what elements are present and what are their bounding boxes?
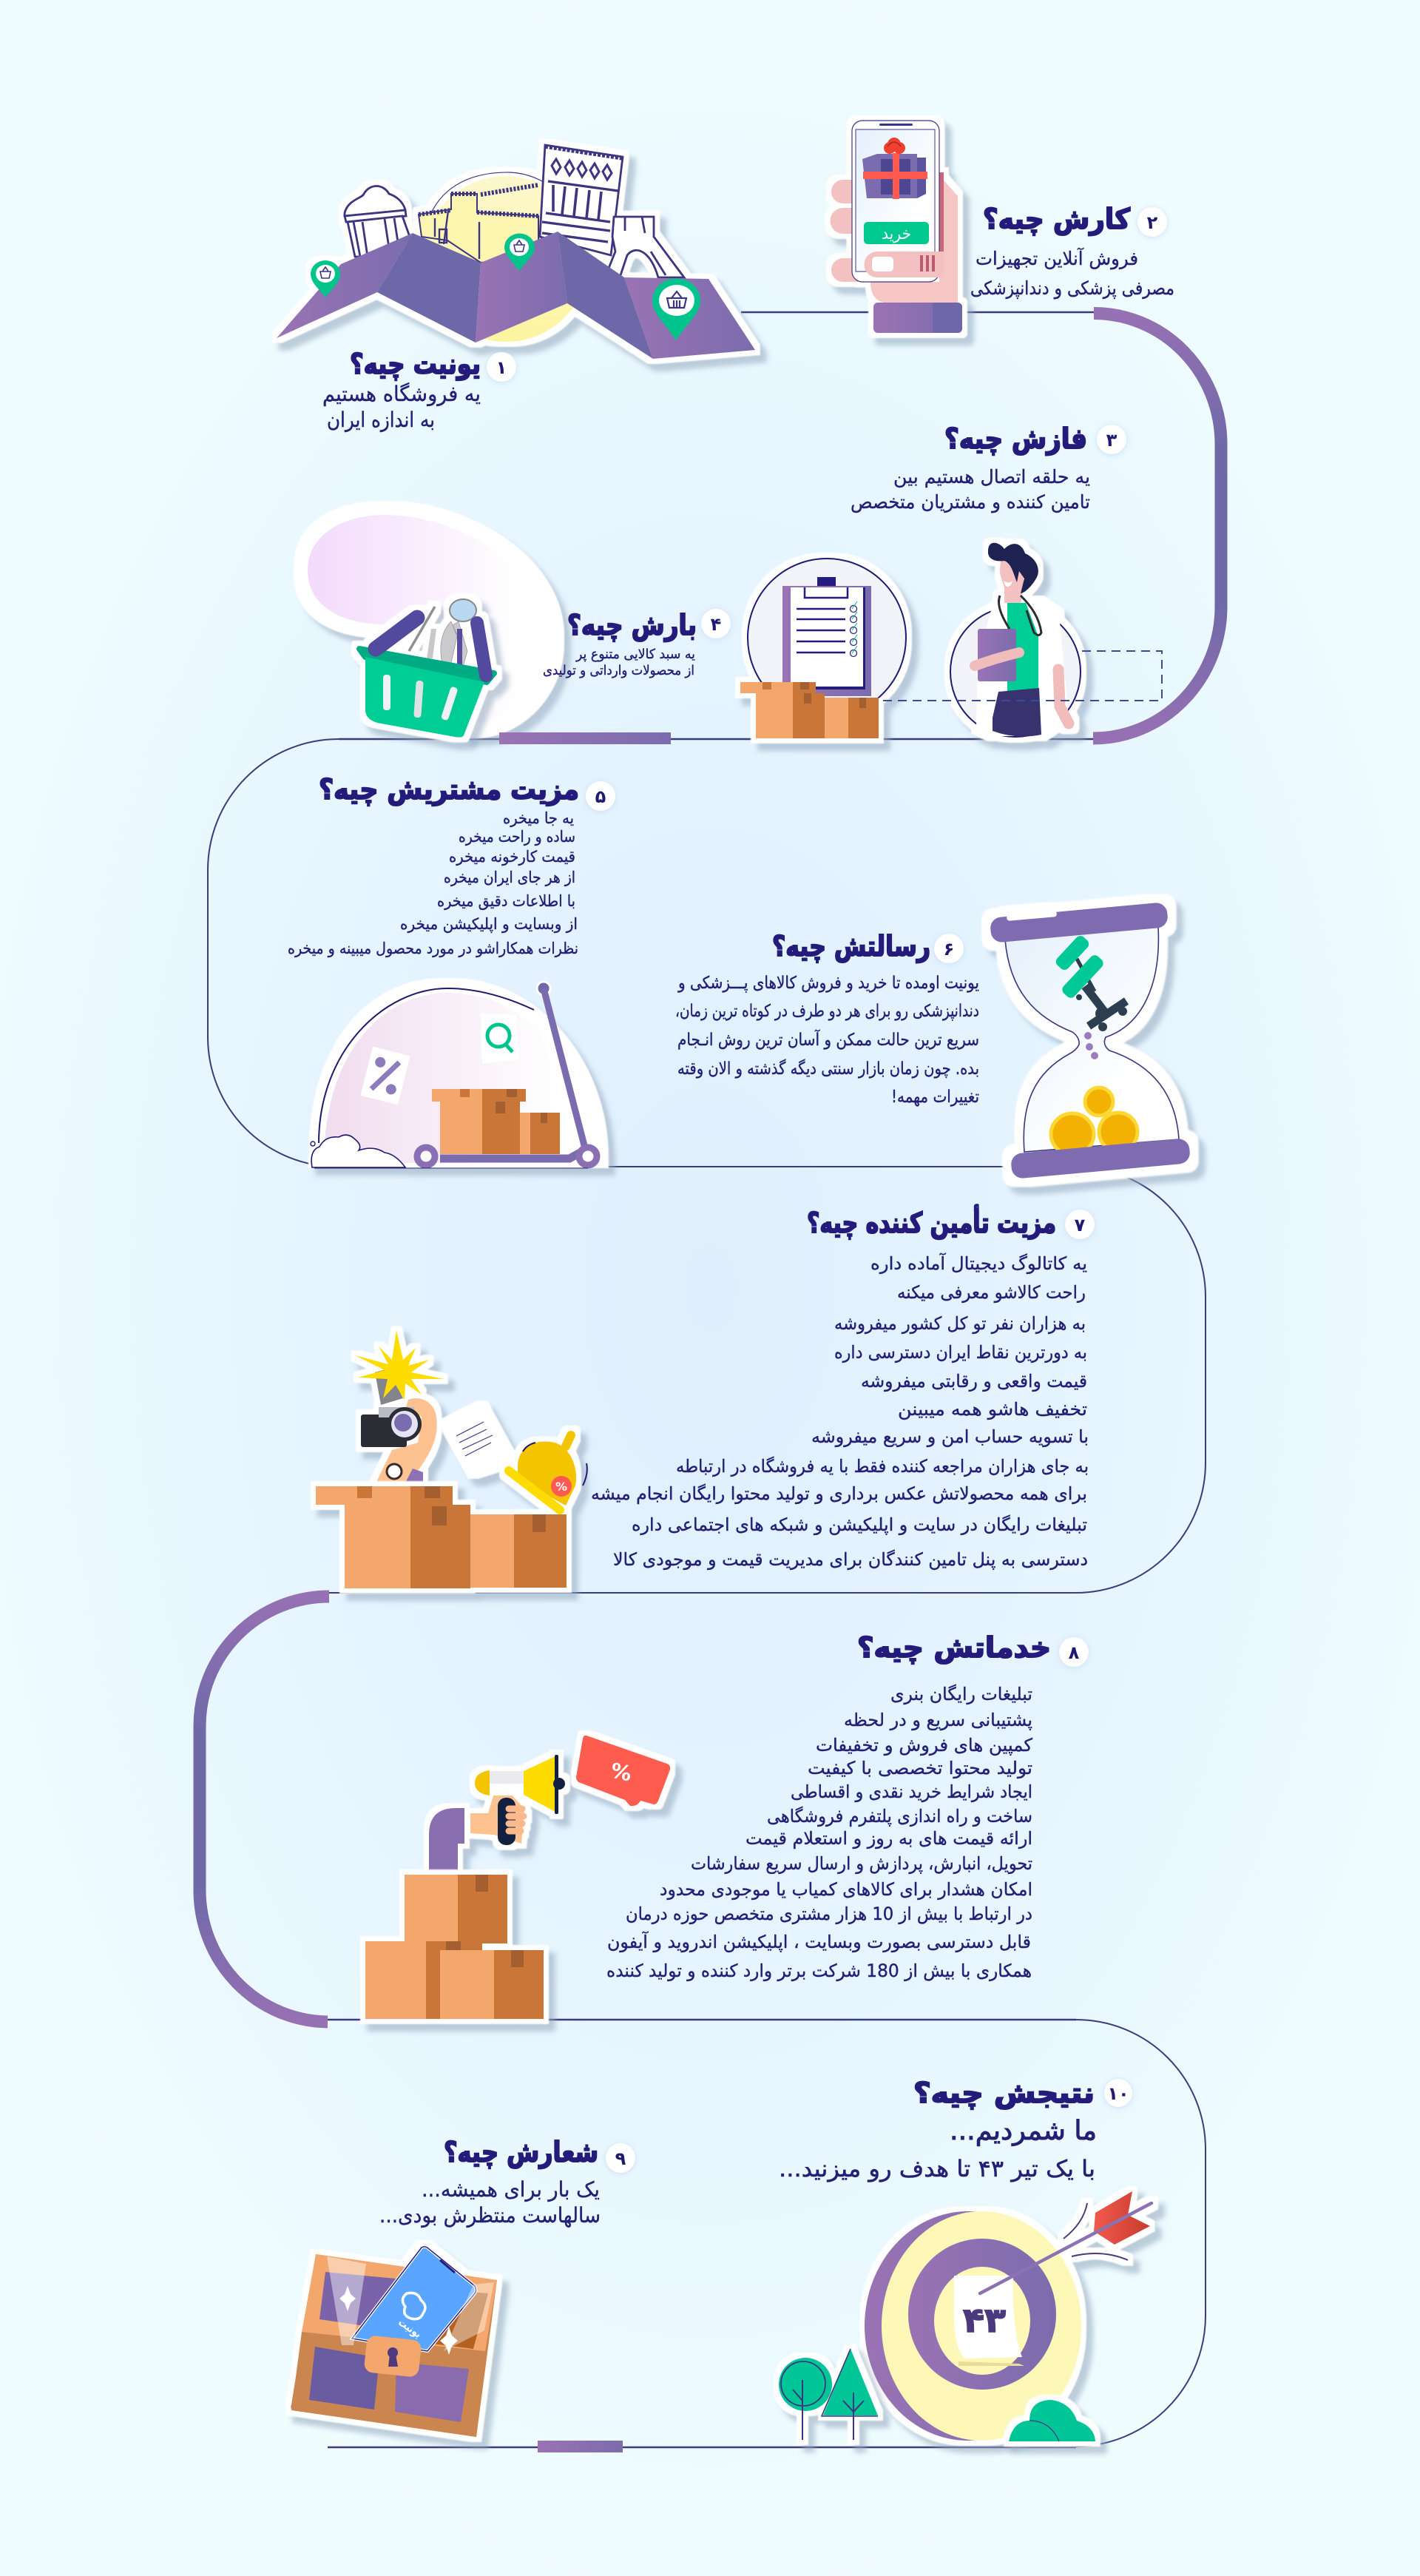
badge 1 bbox=[487, 352, 516, 382]
illustration: camera flash bbox=[355, 1330, 444, 1487]
section 9 text bbox=[379, 2136, 635, 2228]
section 8 text: خدماتش چیه؟ bbox=[857, 1631, 1051, 1664]
badge 2: ۲ bbox=[1147, 212, 1158, 233]
speech bubble bbox=[576, 1736, 670, 1806]
icon: search paper bbox=[481, 1014, 519, 1064]
coins bbox=[1051, 1088, 1137, 1155]
section 1 text bbox=[322, 348, 516, 432]
illustration: doctor bbox=[950, 543, 1081, 737]
tools bbox=[409, 599, 476, 670]
map folds bbox=[277, 232, 755, 359]
section 10 text: با یک تیر ۴۳ تا هدف رو میزنید... bbox=[779, 2156, 1095, 2182]
landmark: azadi tower bbox=[605, 217, 684, 277]
illustration: trees and bush bbox=[779, 2349, 878, 2440]
section 3 text: فازش چیه؟ bbox=[944, 422, 1087, 455]
section 7 text: تخفیف هاشو همه میبینن bbox=[898, 1399, 1087, 1420]
landmark: castle bbox=[419, 185, 538, 263]
basket bbox=[359, 599, 494, 738]
bell motion marks bbox=[523, 1443, 587, 1486]
section 8 text: پشتیبانی سریع و در لحظه bbox=[844, 1710, 1032, 1730]
icon: map pins bbox=[311, 234, 700, 340]
section 7 text: با تسویه حساب امن و سریع میفروشه bbox=[811, 1426, 1089, 1447]
badge 4 bbox=[701, 609, 731, 638]
section 6 text bbox=[675, 930, 979, 1107]
section 7 text: به دورترین نقاط ایران دسترسی داره bbox=[834, 1342, 1087, 1363]
chair bbox=[1054, 934, 1127, 1031]
section 5 text: ساده و راحت میخره bbox=[459, 828, 575, 846]
tablet bbox=[978, 629, 1016, 681]
badge 7 bbox=[1065, 1210, 1095, 1239]
illustration: clipboard and boxes bbox=[740, 559, 906, 738]
illustration: boxes with bell bbox=[316, 1435, 576, 1588]
section 10 text: ما شمردیم... bbox=[950, 2116, 1097, 2146]
section 3 text: یه حلقه اتصال هستیم بین bbox=[893, 466, 1090, 488]
section 9 text: سالهاست منتظرش بودی... bbox=[379, 2203, 601, 2228]
section 4 text bbox=[543, 609, 731, 678]
section 6 text: تغییرات مهمه! bbox=[891, 1088, 979, 1107]
illustration: hourglass bbox=[990, 902, 1191, 1179]
illustration: flying paper bbox=[446, 1406, 513, 1474]
badge 4: ۴ bbox=[711, 614, 721, 635]
section 5 text: از هر جای ایران میخره bbox=[444, 869, 575, 886]
section 8 text: ساخت و راه اندازی پلتفرم فروشگاهی bbox=[767, 1806, 1032, 1827]
section 1 text: به اندازه ایران bbox=[327, 408, 435, 432]
section 3 text bbox=[851, 422, 1126, 513]
section 7 text: تبلیغات رایگان در سایت و اپلیکیشن و شبکه های اجتماعی داره bbox=[632, 1514, 1087, 1535]
badge 3: ۳ bbox=[1106, 430, 1118, 451]
section 8 text: ایجاد شرایط خرید نقدی و اقساطی bbox=[791, 1781, 1032, 1802]
flash star bbox=[355, 1330, 444, 1400]
section 2 text: مصرفی پزشکی و دندانپزشکی bbox=[970, 277, 1174, 300]
badge 5 bbox=[586, 781, 615, 811]
connector path bbox=[200, 312, 1221, 2452]
logo bbox=[402, 2293, 425, 2319]
section 5 text: از وبسایت و اپلیکیشن میخره bbox=[400, 915, 578, 933]
section 5 text: با اطلاعات دقیق میخره bbox=[437, 892, 575, 910]
illustration: stacked boxes bbox=[365, 1875, 544, 2019]
section 4 text: بارش چیه؟ bbox=[567, 609, 697, 641]
section 7 text: به هزاران نفر تو کل کشور میفروشه bbox=[834, 1313, 1086, 1334]
section 6 text: بده. چون زمان بازار سنتی دیگه گذشته و الان وقته bbox=[677, 1059, 979, 1079]
section 10 text bbox=[779, 2077, 1132, 2182]
boxes on scooter bbox=[432, 1089, 560, 1154]
section 7 text: به جای هزاران مراجعه کننده فقط با یه فروشگاه در ارتباطه bbox=[676, 1456, 1089, 1477]
paper 43: ۴۳ bbox=[963, 2300, 1006, 2340]
badge 2 bbox=[1137, 207, 1167, 237]
section 8 text: تحویل، انبارش، پردازش و ارسال سریع سفارشات bbox=[691, 1853, 1032, 1874]
badge 10: ۱۰ bbox=[1107, 2083, 1129, 2104]
illustration: treasure chest with phone bbox=[291, 2247, 497, 2437]
illustration: basket blob bbox=[303, 510, 555, 738]
paper 43 bbox=[954, 2276, 1024, 2366]
section 5 text bbox=[288, 773, 615, 957]
section 5 text: یه جا میخره bbox=[503, 809, 574, 827]
beams and sparkles bbox=[327, 2256, 366, 2345]
bell bbox=[509, 1435, 576, 1510]
landmark: dome tomb bbox=[345, 186, 410, 257]
cuff bbox=[873, 303, 962, 333]
badge 8 bbox=[1059, 1637, 1089, 1667]
phone bbox=[352, 2247, 476, 2351]
section 2 text bbox=[970, 203, 1174, 300]
megaphone bbox=[475, 1770, 490, 1796]
lock bbox=[364, 2335, 422, 2378]
badge 6 bbox=[934, 934, 964, 963]
section 2 text: کارش چیه؟ bbox=[983, 203, 1131, 235]
icon: percent paper bbox=[361, 1047, 410, 1105]
section 7 text: راحت کالاشو معرفی میکنه bbox=[897, 1282, 1086, 1303]
boxes bbox=[740, 682, 879, 738]
arrow bbox=[980, 2191, 1152, 2293]
illustration: megaphone hand and speech bubble bbox=[429, 1736, 670, 1872]
section 1 text: یه فروشگاه هستیم bbox=[322, 382, 481, 406]
section 4 text: یه سبد کالایی متنوع پر bbox=[575, 647, 695, 662]
badge 6: ۶ bbox=[944, 939, 954, 960]
section 8 text bbox=[606, 1631, 1089, 1981]
illustration: map with Iranian landmarks bbox=[277, 145, 755, 359]
button: buy: خرید bbox=[882, 225, 911, 243]
section 8 text: در ارتباط با بیش از 10 هزار مشتری متخصص حوزه درمان bbox=[626, 1904, 1032, 1924]
section 6 text: رسالتش چیه؟ bbox=[772, 930, 930, 962]
badge 9 bbox=[606, 2143, 635, 2173]
section 7 text bbox=[591, 1204, 1095, 1570]
section 7 text: یه کاتالوگ دیجیتال آماده داره bbox=[870, 1252, 1087, 1274]
badge 1: ۱ bbox=[496, 357, 507, 378]
arms bbox=[375, 1398, 437, 1486]
badge 9: ۹ bbox=[615, 2148, 626, 2169]
section 7 text: مزیت تأمین کننده چیه؟ bbox=[807, 1204, 1056, 1239]
bush bbox=[1009, 2400, 1095, 2441]
section 8 text: قابل دسترسی بصورت وبسایت ، اپلیکیشن اندروید و آیفون bbox=[607, 1931, 1031, 1952]
badge 3 bbox=[1097, 425, 1126, 454]
section 8 text: تبلیغات رایگان بنری bbox=[890, 1684, 1032, 1705]
illustration: hand holding phone bbox=[830, 121, 962, 333]
illustration: scooter dome bbox=[311, 982, 604, 1168]
section 8 text: امکان هشدار برای کالاهای کمیاب یا موجودی محدود bbox=[660, 1879, 1032, 1900]
section 3 text: تامین کننده و مشتریان متخصص bbox=[851, 491, 1090, 513]
icon: gift safe bbox=[862, 138, 927, 199]
section 6 text: سریع ترین حالت ممکن و آسان ترین روش انـجام bbox=[677, 1029, 979, 1050]
section 10 text: نتیجش چیه؟ bbox=[913, 2077, 1095, 2109]
section 9 text: یک بار برای همیشه... bbox=[422, 2177, 600, 2202]
section 6 text: دندانپزشکی رو برای هر دو طرف در کوتاه ترین زمان، bbox=[675, 1002, 979, 1021]
section 7 text: دسترسی به پنل تامین کنندگان برای مدیریت قیمت و موجودی کالا bbox=[613, 1549, 1088, 1570]
cloud bbox=[311, 1135, 405, 1167]
section 8 text: کمپین های فروش و تخفیفات bbox=[816, 1735, 1033, 1756]
section 7 text: قیمت واقعی و رقابتی میفروشه bbox=[861, 1371, 1087, 1392]
section 8 text: ارائه قیمت های به روز و استعلام قیمت bbox=[746, 1828, 1032, 1849]
dashed connector bbox=[883, 651, 1162, 701]
purple bar under basket bbox=[499, 732, 671, 744]
landmark: wind tower bbox=[540, 145, 623, 255]
section 2 text: فروش آنلاین تجهیزات bbox=[976, 247, 1138, 270]
section 8 text: تولید محتوا تخصصی با کیفیت bbox=[808, 1758, 1032, 1778]
phone: یونیت bbox=[396, 2316, 425, 2341]
button: buy bbox=[864, 222, 929, 244]
clipboard bbox=[782, 577, 871, 696]
illustration: target with arrow bbox=[865, 2191, 1152, 2441]
bell: % bbox=[555, 1480, 567, 1494]
hourglass caps bbox=[990, 902, 1191, 1179]
badge 5: ۵ bbox=[595, 786, 606, 807]
section 5 text: نظرات همکاراشو در مورد محصول میبینه و میخره bbox=[288, 940, 578, 957]
section 4 text: از محصولات وارداتی و تولیدی bbox=[543, 663, 694, 678]
camera bbox=[361, 1415, 407, 1447]
section 8 text: همکاری با بیش از 180 شرکت برتر وارد کننده و تولید کننده bbox=[606, 1960, 1032, 1981]
section 7 text: برای همه محصولاتش عکس برداری و تولید محتوا رایگان انجام میشه bbox=[591, 1483, 1087, 1504]
section 1 text: یونیت چیه؟ bbox=[350, 348, 481, 380]
badge 8: ۸ bbox=[1069, 1642, 1080, 1663]
arm bbox=[429, 1808, 464, 1872]
section 6 text: یونیت اومده تا خرید و فروش کالاهای پـــزشکی و bbox=[677, 974, 979, 993]
badge 10 bbox=[1104, 2079, 1132, 2107]
badge 7: ۷ bbox=[1075, 1215, 1086, 1235]
speech bubble: % bbox=[609, 1758, 634, 1787]
scooter bbox=[417, 982, 597, 1165]
section 9 text: شعارش چیه؟ bbox=[444, 2136, 598, 2168]
section 5 text: مزیت مشتریش چیه؟ bbox=[319, 773, 579, 806]
section 5 text: قیمت کارخونه میخره bbox=[449, 848, 575, 866]
